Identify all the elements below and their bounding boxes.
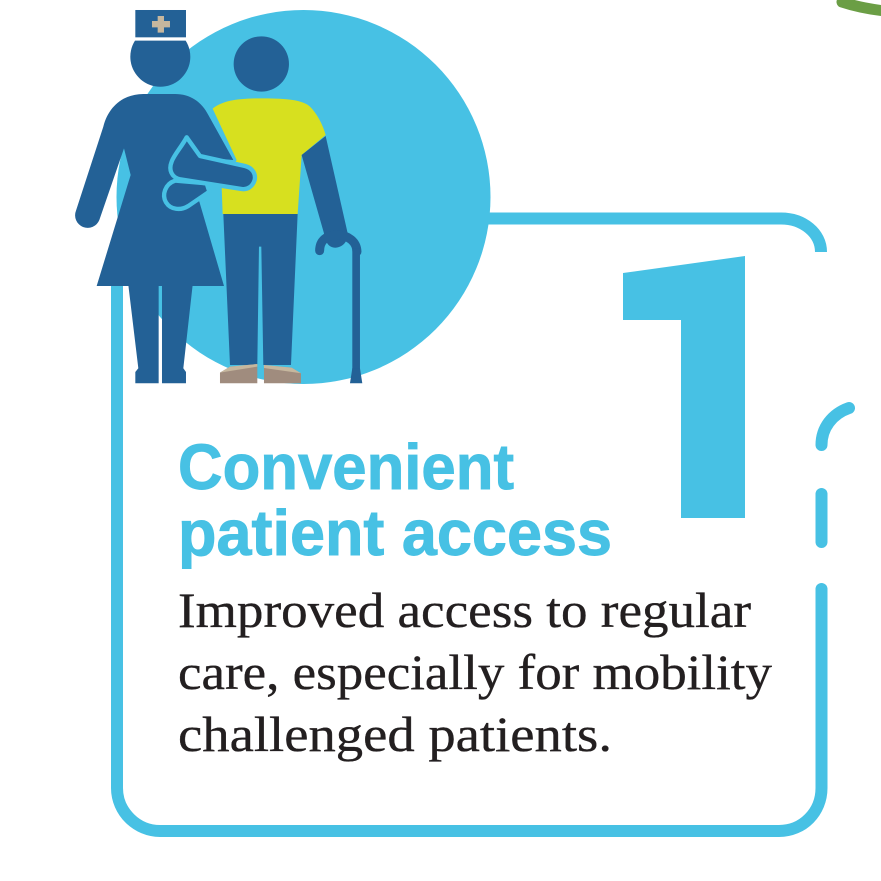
patient shoes: [220, 364, 301, 383]
nurse upper forearm: [170, 137, 255, 189]
card border: [117, 218, 849, 831]
patient arm and hand: [302, 136, 348, 248]
decorative green arc at top right: [842, 2, 881, 11]
heading: Convenient: [178, 431, 514, 503]
patient shirt: [213, 98, 326, 214]
heading: patient access: [178, 497, 612, 569]
big number 1: [623, 256, 745, 518]
patient trousers: [223, 214, 298, 365]
nurse body and dress: [75, 94, 233, 286]
body text: care, especially for mobility: [178, 644, 772, 700]
body text: challenged patients.: [178, 706, 612, 762]
heading: [178, 431, 612, 569]
icon: nurse cap: [135, 10, 186, 37]
icon: nurse and patient with cane: [75, 10, 362, 383]
walking cane: [320, 235, 362, 383]
background circle: [116, 10, 490, 384]
nurse lower forearm: [164, 181, 209, 209]
body text: [178, 582, 772, 762]
patient head: [234, 36, 289, 92]
nurse head: [130, 41, 190, 87]
nurse legs: [128, 285, 193, 383]
body text: Improved access to regular: [178, 582, 751, 638]
